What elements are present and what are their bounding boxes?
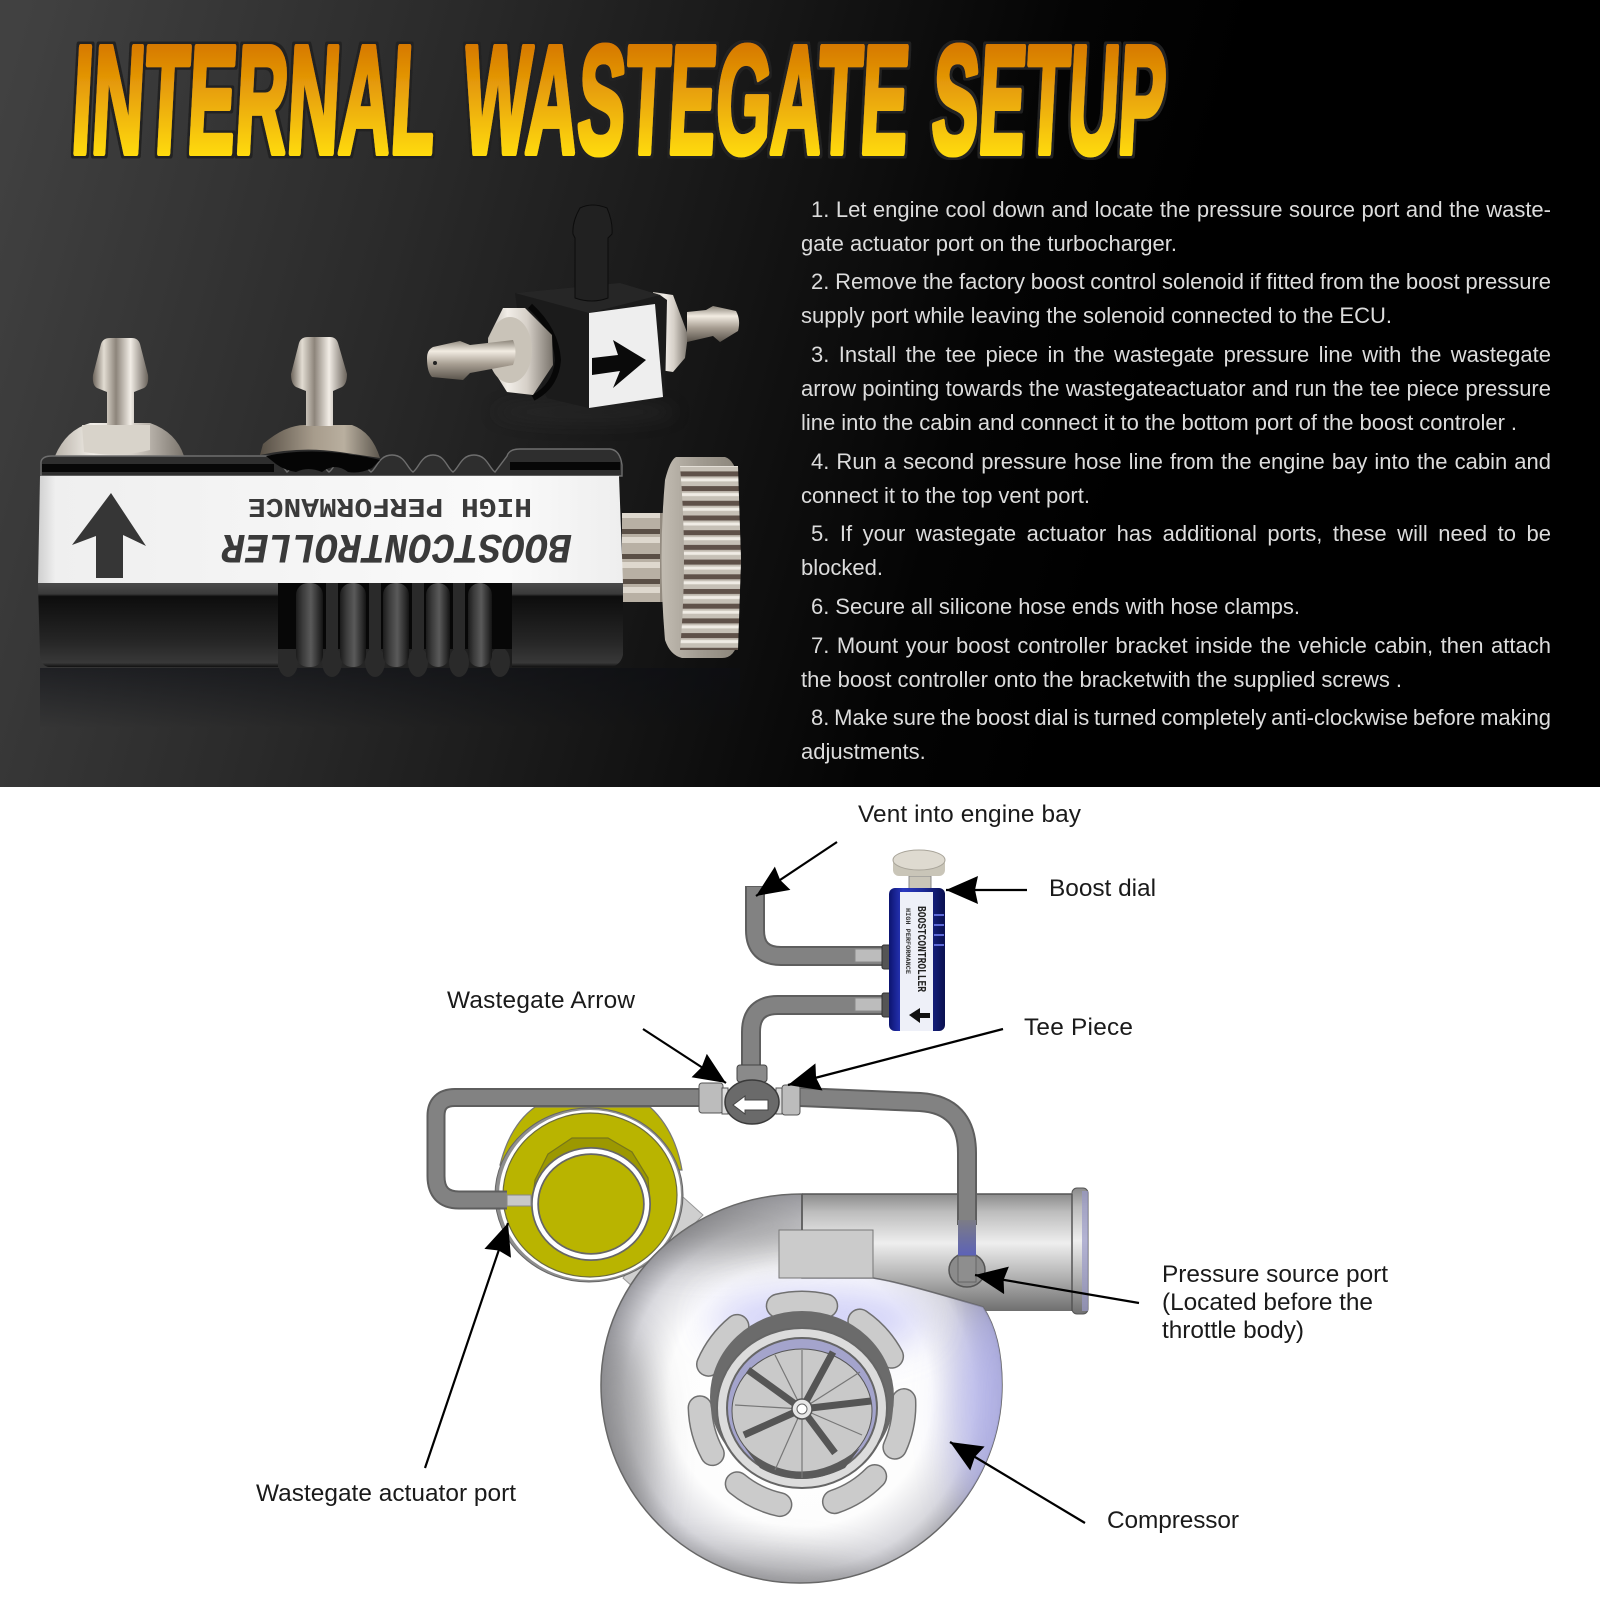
right fitting barb [291,337,347,426]
actuator mounting bracket [623,1197,703,1287]
label: pressure source port: (Located before the [1162,1289,1373,1316]
pipe: vent line [755,886,882,962]
tee label [589,304,663,408]
label: compressor: Compressor [1107,1507,1239,1534]
controller knob [893,850,945,876]
arrow: actuator port [425,1223,508,1468]
controller ports [882,945,891,1017]
product photo: boost controller [38,337,741,728]
pressure source port [949,1253,985,1287]
right fitting nut [260,425,380,458]
label: wastegate actuator port: Wastegate actuator port [256,1480,516,1507]
arrow: vent [756,842,837,896]
arrow: pressure source [975,1275,1139,1303]
inner ring [535,1151,647,1257]
label: pressure source port [1162,1261,1388,1344]
label text: BOOSTCONTROLLER [221,522,572,570]
pipe: actuator line [436,1098,700,1206]
artwork canvas: SETUP [928,13,1170,186]
controller label text: BOOSTCONTROLLER [914,906,928,993]
label: boost dial: Boost dial [1049,875,1156,902]
installation steps text [801,198,1551,764]
controller label [38,476,623,583]
label: tee piece: Tee Piece [1024,1014,1133,1041]
lower body [38,583,623,667]
title: INTERNAL [68,13,440,186]
left barb [427,340,516,380]
controller label subtext: HIGH PERFORMANCE [904,908,911,974]
upward barb [573,205,612,301]
arrow: tee piece [788,1029,1003,1085]
label: pressure source port: Pressure source port [1162,1261,1388,1288]
right nut [653,292,688,372]
controller arrow [909,1008,930,1023]
knob shaft [622,513,674,602]
compressor housing [600,1193,1003,1584]
compressor inlet and impeller [710,1311,894,1488]
white diagram panel [0,787,1600,1600]
tee piece in diagram [699,1065,800,1124]
arrow: compressor [950,1442,1085,1523]
mini boost controller [882,850,945,1031]
O ring [530,306,558,398]
nameplate [779,1230,873,1278]
lower body ribs [278,583,512,667]
intake tube [802,1188,1088,1314]
label: vent: Vent into engine bay [858,801,1082,828]
tee arrow [592,340,646,388]
back lobes [500,1107,682,1170]
inner recess [532,1138,650,1204]
label arrow [72,493,146,578]
title: WASTEGATE [459,13,913,186]
tee body [515,283,667,408]
housing petals [658,1261,946,1549]
arrow: boost dial [946,889,1027,891]
dark header panel [0,0,1600,787]
label: pressure source port: throttle body) [1162,1317,1304,1344]
left fitting nut [55,423,184,456]
reflection [40,668,740,728]
controller body [889,888,945,1031]
pipe: controller feed line [751,998,882,1066]
left nut [488,308,553,395]
pipe: pressure source line [800,1097,976,1282]
controller label [900,892,933,1031]
product photo: tee piece [427,205,739,424]
controller knob stem [909,876,931,896]
knob [662,457,741,658]
top rail [41,449,622,476]
right barb [687,306,739,342]
label: wastegate arrow: Wastegate Arrow [447,987,635,1014]
left fitting barb [93,338,148,425]
rib bump shadows [278,647,510,677]
tee arrow [733,1096,768,1114]
wastegate actuator [495,1107,683,1282]
label subtext: HIGH PERFORMANCE [248,490,532,520]
actuator face [503,1113,677,1277]
arrow: wastegate arrow [643,1029,726,1083]
